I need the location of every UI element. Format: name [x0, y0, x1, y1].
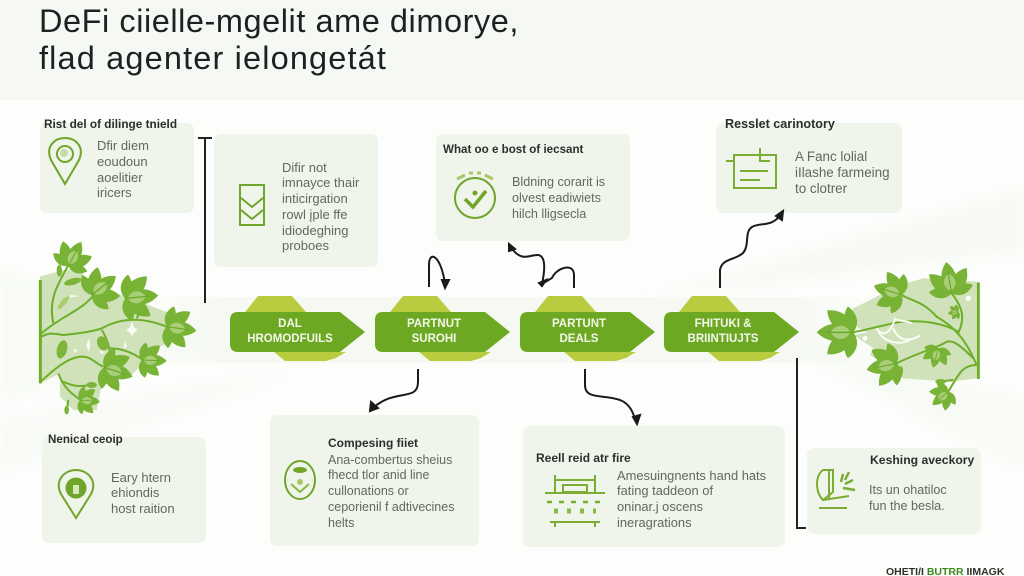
- text: oninar.j oscens: [617, 499, 703, 514]
- text: Ana-combertus sheius: [328, 452, 452, 466]
- text: [869, 483, 947, 513]
- text: cullonations or: [328, 484, 409, 498]
- text: Dfir diem: [97, 138, 149, 153]
- text: fating taddeon of: [617, 483, 713, 498]
- panel: reell: [523, 426, 785, 547]
- panel: top left: [40, 117, 194, 213]
- panel: bottom left: [42, 433, 206, 543]
- heading: Keshing aveckory: [870, 453, 974, 467]
- text: [512, 175, 605, 221]
- text: fhecd tlor anid line: [328, 468, 429, 482]
- text: Difir not: [282, 160, 327, 174]
- text: imnayce thair: [282, 175, 359, 190]
- text: A Fanc lolial: [795, 149, 867, 164]
- text: inticirgation: [282, 191, 348, 206]
- title: [39, 3, 519, 76]
- icon: face badge: [284, 460, 316, 500]
- text: [97, 138, 149, 200]
- text: [795, 149, 890, 196]
- text: proboes: [282, 238, 329, 253]
- icon: terrace: [545, 475, 605, 527]
- text: idiodeghing: [282, 223, 349, 238]
- heading: Resslet carinotory: [725, 117, 835, 131]
- text: iIlashe farmeing: [795, 165, 890, 180]
- text: ineragrations: [617, 515, 692, 530]
- pill label 2: [407, 318, 461, 345]
- text: Bldning corarit is: [512, 175, 605, 189]
- text: aoelitier: [97, 170, 143, 185]
- heading: What oo e bost of iecsant: [443, 143, 583, 156]
- pill label 1: DAL: [278, 318, 302, 330]
- pill label 1: [247, 318, 333, 345]
- pill label 2: SUROHI: [412, 333, 456, 345]
- timeline line left: [198, 137, 212, 303]
- panel: keshing: [807, 448, 981, 534]
- title: flad agenter ielongetát: [39, 40, 387, 76]
- heading: Reell reid atr fire: [536, 451, 631, 465]
- text: fun the besla.: [869, 499, 945, 513]
- pill label 4: FHITUKI &: [695, 318, 751, 330]
- pill label 4: BRIINTIUJTS: [688, 333, 758, 345]
- icon: bulb pin: [58, 469, 94, 520]
- icon: plant chair: [816, 469, 856, 509]
- plant: right: [816, 262, 980, 410]
- pill label 3: DEALS: [560, 333, 598, 345]
- text: olvest eadiwiets: [512, 191, 601, 205]
- title: DeFi ciielle-mgelit ame dimorye,: [39, 3, 519, 39]
- text: [328, 452, 454, 530]
- text: Its un ohatiloc: [869, 483, 947, 497]
- icon: document: [726, 148, 777, 189]
- text: ehiondis: [111, 485, 159, 500]
- panel: upper second: [214, 134, 378, 267]
- text: helts: [328, 516, 354, 530]
- pill label 3: PARTUNT: [552, 318, 606, 330]
- text: rowl įple ffe: [282, 207, 348, 222]
- heading: Rist del of dilinge tnield: [44, 117, 177, 131]
- pill label 4: [688, 318, 758, 345]
- icon: check circle: [454, 172, 496, 219]
- text: [617, 468, 766, 530]
- panel: comparing: [270, 415, 479, 546]
- text: host raition: [111, 501, 175, 516]
- icon: location pin: [48, 137, 82, 186]
- text: Eary htern: [111, 470, 171, 484]
- pill label 1: HROMODFUILS: [247, 333, 333, 345]
- text: [111, 470, 175, 516]
- text: Amesuingnents hand hats: [617, 468, 766, 482]
- heading: Nenical ceoip: [48, 433, 123, 446]
- icon: checklist: [239, 184, 265, 226]
- text: eoudoun: [97, 154, 148, 169]
- text: hilch lligsecla: [512, 207, 586, 221]
- text: [282, 160, 360, 253]
- timeline line right: [796, 358, 806, 529]
- plant: left: [38, 241, 196, 414]
- pill label 2: PARTNUT: [407, 318, 461, 330]
- text: ceporienil f adtivecines: [328, 500, 454, 514]
- text: to clotrer: [795, 181, 847, 196]
- panel: result: [716, 117, 902, 213]
- heading: Compesing fiiet: [328, 436, 418, 450]
- pill label 3: [552, 318, 606, 345]
- text: iricers: [97, 185, 132, 200]
- panel: what: [436, 134, 630, 241]
